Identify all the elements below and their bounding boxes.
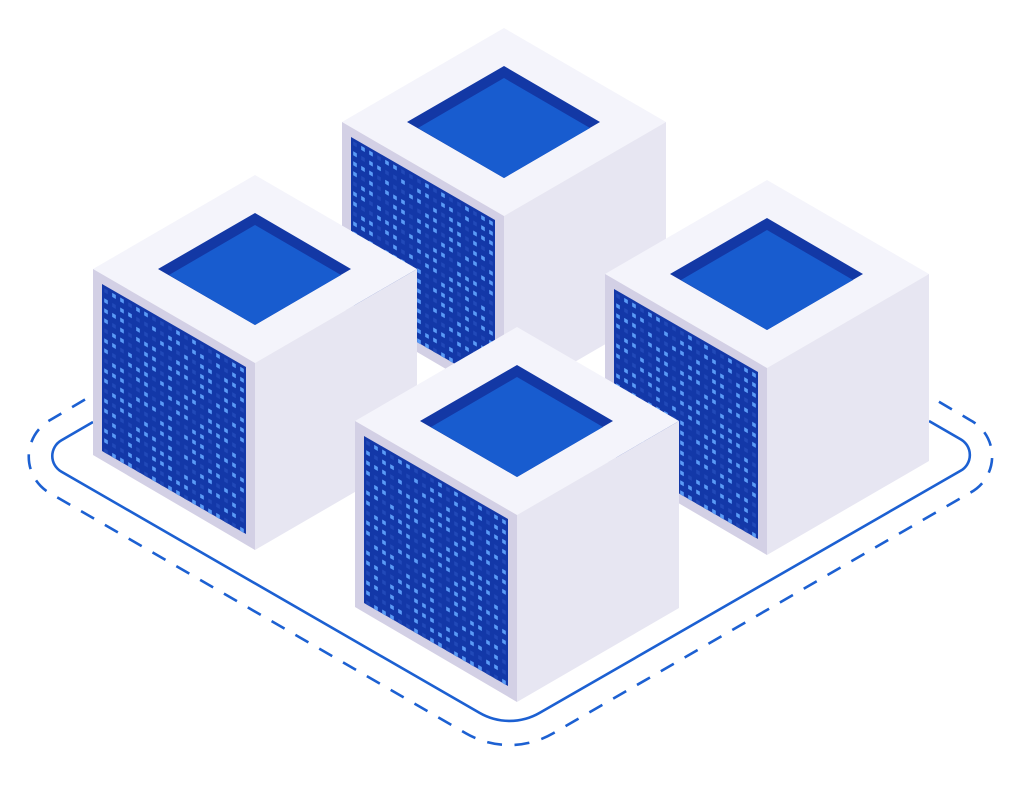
cube: left [93, 175, 417, 550]
platform outline: dashed outer line [29, 400, 992, 745]
platform outline: solid inner line [52, 421, 970, 721]
cube: front [355, 327, 679, 702]
cube: right [605, 180, 929, 555]
cube: back [342, 28, 666, 403]
